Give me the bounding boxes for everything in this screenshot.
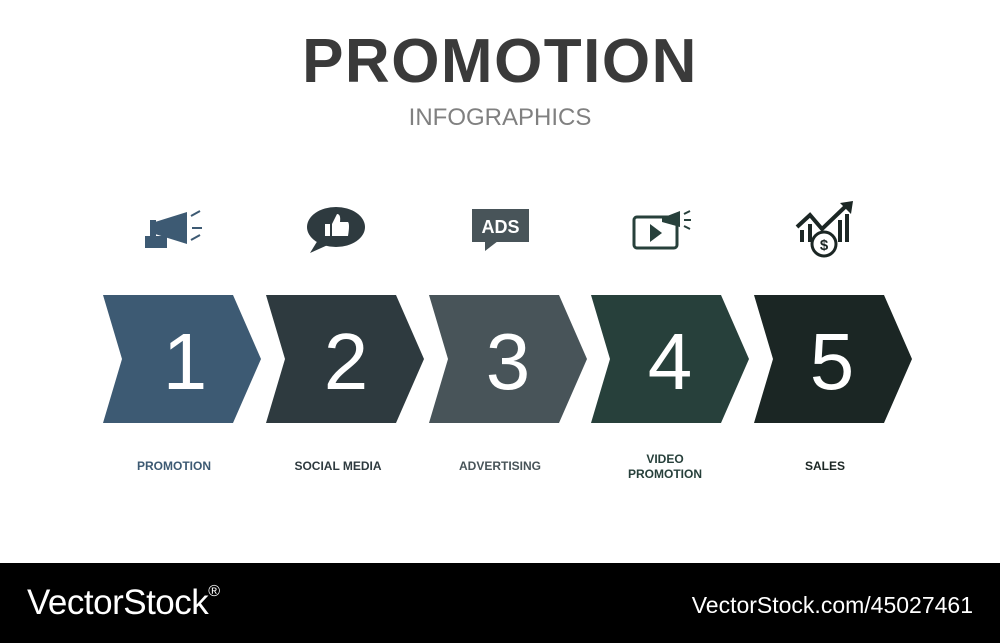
label 2: SOCIAL MEDIA	[294, 459, 382, 473]
icon: ads bubble: ADS	[481, 217, 520, 237]
title: PROMOTION	[302, 27, 698, 96]
footer bar	[0, 563, 1000, 643]
step 5	[754, 295, 912, 423]
icon: sales chart	[797, 201, 853, 256]
label 5: SALES	[805, 459, 845, 473]
step 5: 5	[810, 317, 854, 406]
label 4: PROMOTION	[628, 467, 702, 481]
icon: video promotion	[634, 211, 691, 248]
step 1: 1	[163, 317, 207, 406]
step 4: 4	[648, 317, 692, 406]
step 3: 3	[486, 317, 530, 406]
step 2: 2	[324, 317, 368, 406]
icon: sales chart: $	[820, 237, 829, 254]
label 4	[628, 452, 702, 481]
label 3: ADVERTISING	[459, 459, 541, 473]
icon: thumbs up bubble	[307, 207, 365, 253]
icon: megaphone	[145, 211, 202, 248]
subtitle: INFOGRAPHICS	[409, 104, 591, 131]
icon: ads bubble	[472, 209, 529, 251]
label 1: PROMOTION	[137, 459, 211, 473]
step 2	[266, 295, 424, 423]
footer brand: VectorStock®	[27, 583, 220, 622]
step 1	[103, 295, 261, 423]
step 4	[591, 295, 749, 423]
step 3	[429, 295, 587, 423]
label 4: VIDEO	[646, 452, 684, 466]
footer url: VectorStock.com/45027461	[692, 592, 973, 618]
